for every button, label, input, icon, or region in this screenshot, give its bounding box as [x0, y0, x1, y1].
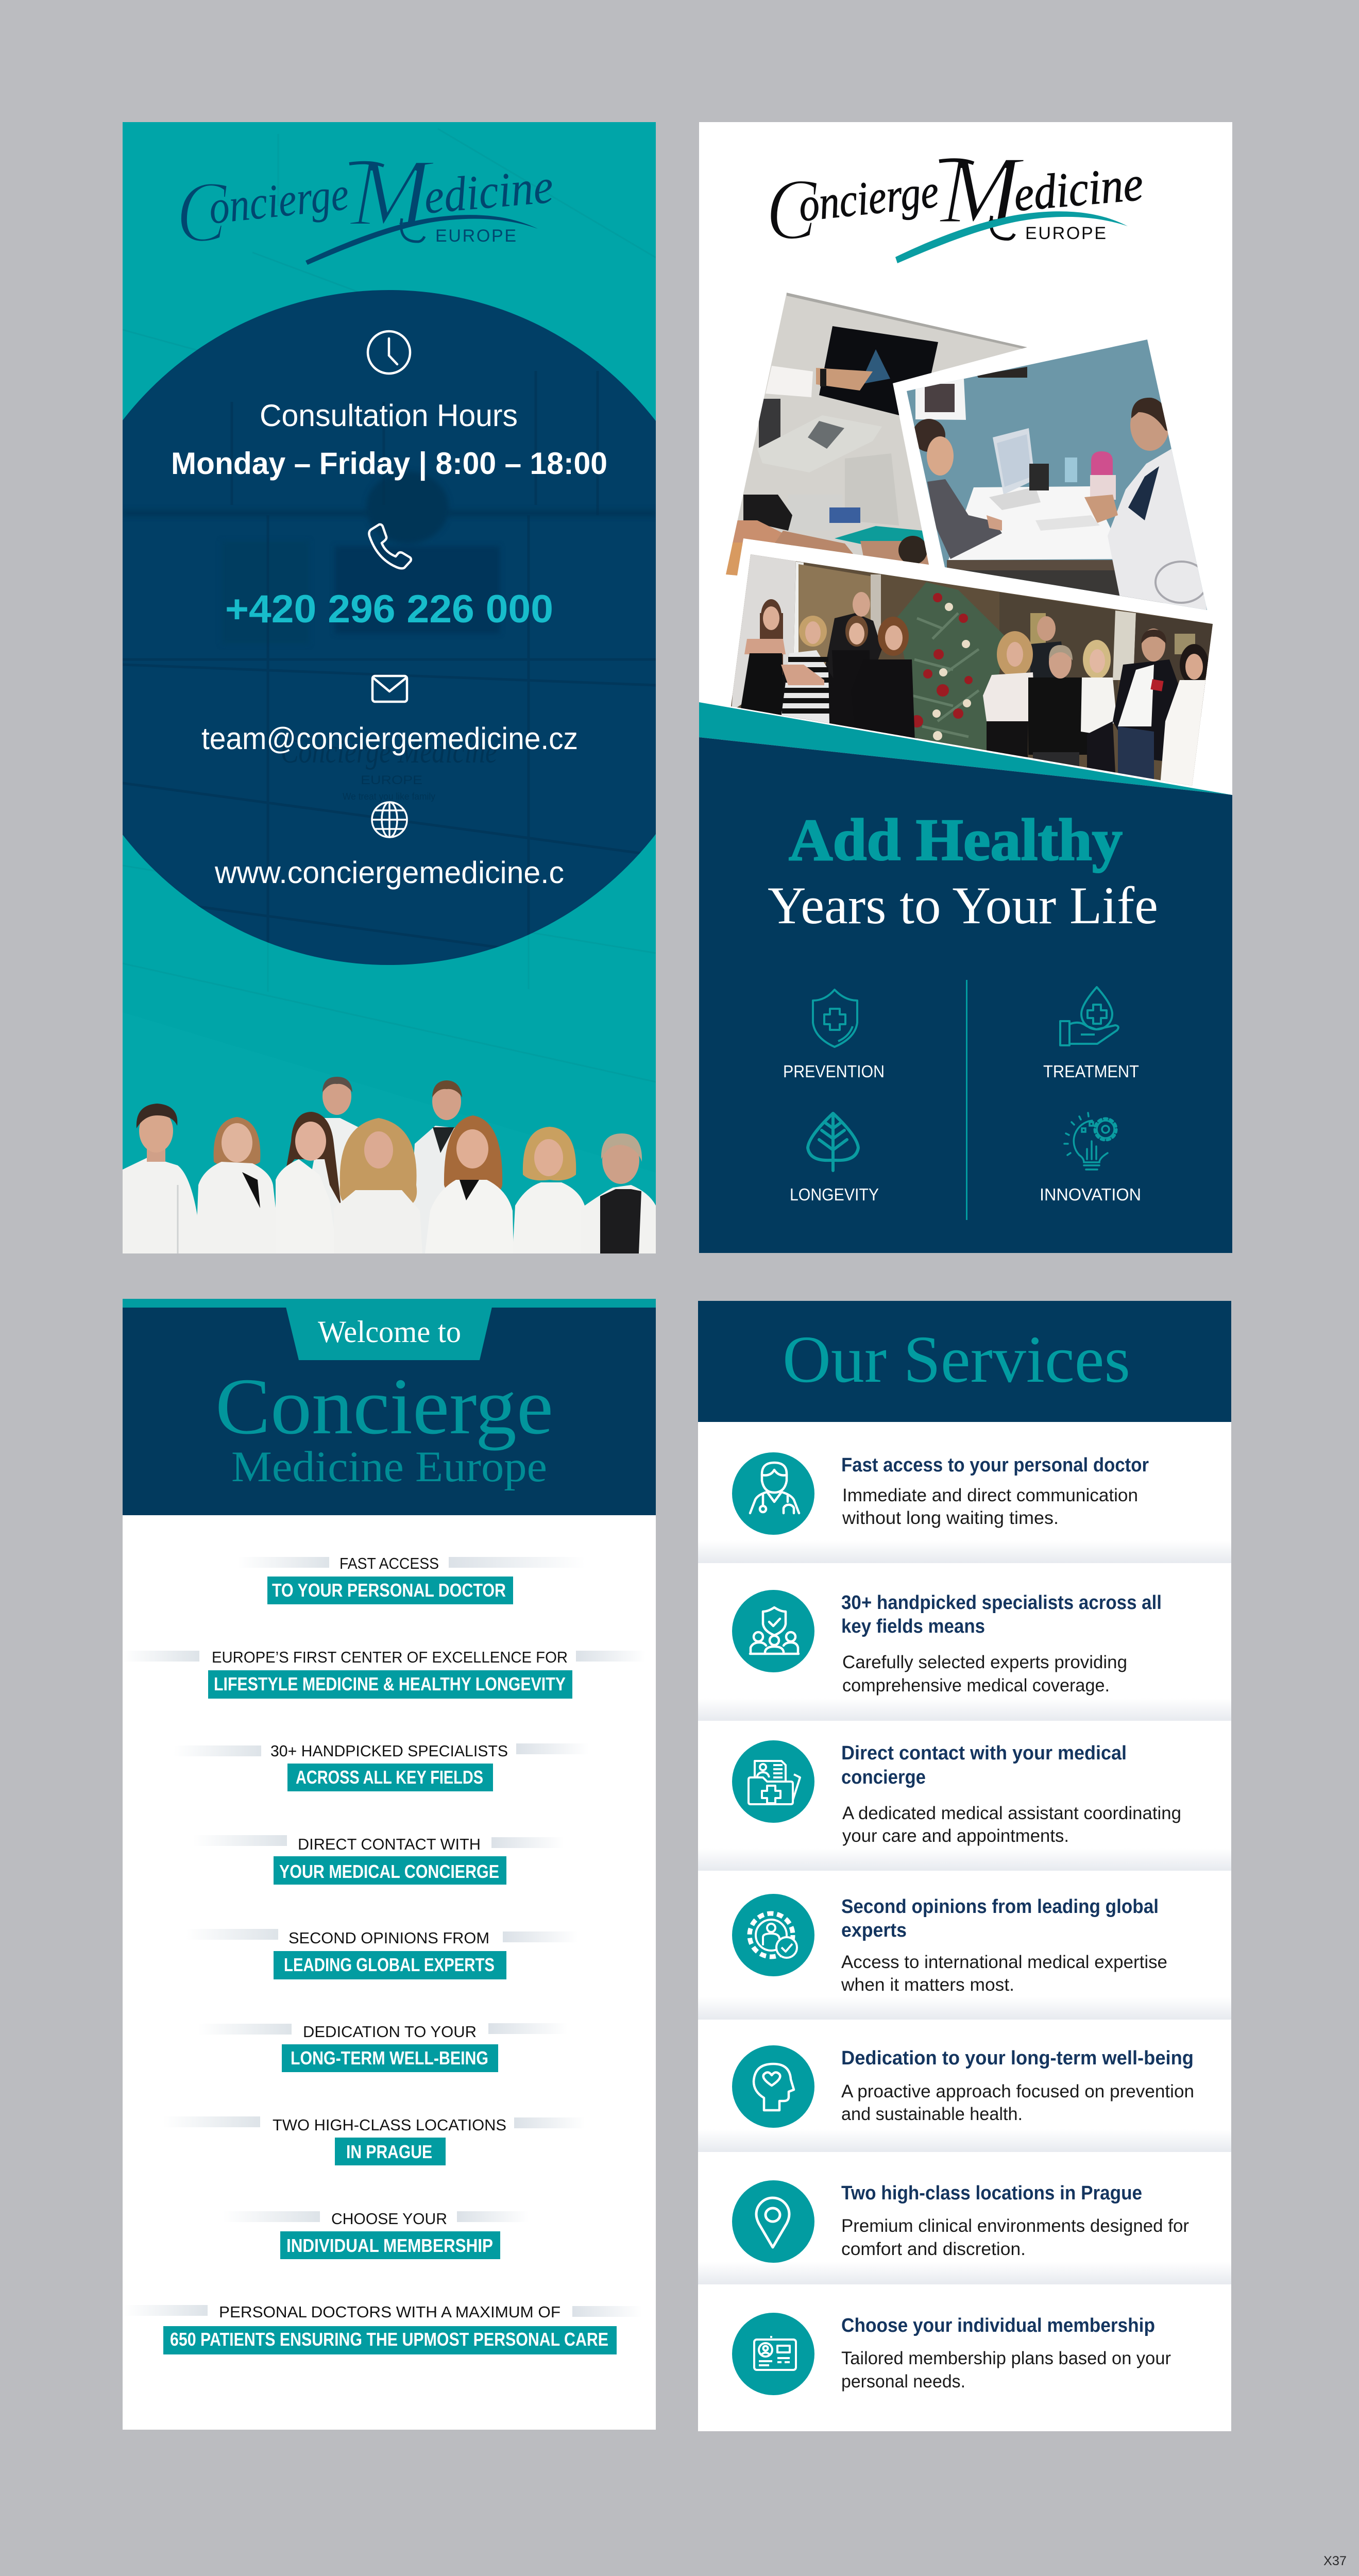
service title [841, 1896, 1159, 1941]
logo: black on white: edicine [1012, 156, 1145, 222]
list item: personal doctors: PERSONAL DOCTORS WITH A MAXIMUM OF [219, 2303, 560, 2321]
list item: personal doctors: 650 PATIENTS ENSURING THE UPMOST PERSONAL CARE [170, 2329, 608, 2350]
list item: direct contact: DIRECT CONTACT WITH [298, 1835, 481, 1853]
service description: and sustainable health. [841, 2104, 1023, 2124]
logo: navy on teal: oncierge [206, 167, 351, 234]
icon: medical folder [732, 1740, 814, 1823]
service description [842, 1485, 1138, 1528]
service title [841, 1592, 1162, 1637]
service title: Two high-class locations in Prague [841, 2182, 1142, 2204]
icon: membership card [732, 2313, 814, 2395]
service description: Premium clinical environments designed for [841, 2216, 1189, 2236]
headline: years to your life: Years to Your Life [768, 876, 1158, 935]
service description: comprehensive medical coverage. [842, 1675, 1110, 1696]
list item: second opinions [186, 1929, 578, 1979]
icon: shield and people [732, 1590, 814, 1672]
heading: our services: Our Services [783, 1323, 1130, 1397]
logo: black on white: C [766, 161, 817, 258]
service description: A proactive approach focused on prevention [841, 2081, 1194, 2102]
service description: Carefully selected experts providing [842, 1652, 1127, 1672]
panel: add healthy years [699, 122, 1232, 1253]
service description: your care and appointments. [842, 1826, 1069, 1846]
service description: without long waiting times. [842, 1508, 1059, 1528]
service description: personal needs. [841, 2371, 965, 2392]
service description: when it matters most. [841, 1975, 1014, 1995]
list item: specialists: 30+ HANDPICKED SPECIALISTS [270, 1742, 508, 1760]
list item: membership [223, 2210, 529, 2259]
website address: www.conciergemedicine.c [214, 855, 564, 890]
list item: center of excellence: EUROPE’S FIRST CENTER OF EXCELLENCE FOR [212, 1648, 568, 1666]
list item: second opinions: LEADING GLOBAL EXPERTS [284, 1954, 495, 1975]
photo: ultrasound examination [721, 289, 1030, 577]
consultation hours label: Consultation Hours [260, 398, 518, 433]
list item: membership: INDIVIDUAL MEMBERSHIP [286, 2235, 493, 2256]
icon: leaf [808, 1113, 858, 1171]
watermark logo on wall [282, 739, 497, 802]
panel: welcome list [123, 1299, 656, 2430]
service: long-term well-being [732, 2045, 1194, 2128]
headline: add healthy: Add Healthy [789, 807, 1123, 873]
logo: black on white: oncierge [796, 164, 941, 231]
icon: light bulb with gear [1064, 1113, 1116, 1170]
watermark logo on wall: EUROPE [361, 773, 422, 787]
service description [842, 1652, 1127, 1696]
service title [841, 1742, 1127, 1788]
service: fast access [732, 1452, 1149, 1535]
service title: Second opinions from leading global [841, 1896, 1159, 1918]
list item: fast access: FAST ACCESS [339, 1554, 439, 1572]
label: longevity: LONGEVITY [790, 1185, 879, 1204]
services header band [698, 1301, 1231, 1422]
label: prevention: PREVENTION [783, 1062, 885, 1081]
list item: dedication: DEDICATION TO YOUR [303, 2023, 477, 2041]
corner code label: X37 [1323, 2554, 1347, 2568]
service description [841, 2216, 1189, 2259]
icon: doctor [732, 1452, 814, 1535]
panel: contact banner [123, 122, 656, 1253]
service: membership [732, 2313, 1171, 2395]
logo: black on white [766, 137, 1145, 263]
service description: Access to international medical expertise [841, 1952, 1167, 1972]
service: locations [732, 2180, 1189, 2263]
icon: gear with person and check [732, 1894, 814, 1976]
service title: Direct contact with your medical [841, 1742, 1127, 1764]
service: second opinions [732, 1894, 1167, 1995]
service description [841, 1952, 1167, 1995]
list item: membership: CHOOSE YOUR [331, 2210, 447, 2228]
service: medical concierge [732, 1740, 1181, 1846]
list item: fast access [237, 1554, 585, 1604]
header band [123, 1299, 656, 1515]
list item: second opinions: SECOND OPINIONS FROM [288, 1929, 489, 1947]
heading: medicine europe: Medicine Europe [231, 1443, 547, 1491]
icon: hand holding drop [1060, 987, 1118, 1045]
icon: clock [368, 331, 410, 374]
list item: center of excellence: LIFESTYLE MEDICINE & HEALTHY LONGEVITY [214, 1673, 566, 1694]
service title: Fast access to your personal doctor [841, 1454, 1149, 1476]
label: innovation: INNOVATION [1040, 1185, 1141, 1204]
icon: shield with cross [813, 990, 857, 1047]
icon: map pin [732, 2180, 814, 2263]
logo: navy on teal: M [349, 140, 435, 246]
photo: team by christmas tree [726, 551, 1221, 793]
service title: Dedication to your long-term well-being [841, 2047, 1194, 2069]
consultation times: Monday – Friday | 8:00 – 18:00 [171, 446, 607, 481]
watermark logo on wall: Concierge Medicine [281, 733, 497, 770]
logo: navy on teal [176, 140, 555, 265]
list item: direct contact [193, 1835, 564, 1885]
service title: key fields means [841, 1616, 985, 1637]
list item: locations: TWO HIGH-CLASS LOCATIONS [273, 2116, 506, 2134]
icon: globe [372, 802, 407, 837]
list item: specialists: ACROSS ALL KEY FIELDS [296, 1767, 483, 1788]
service: specialists [732, 1590, 1162, 1696]
list item: dedication: LONG-TERM WELL-BEING [291, 2047, 488, 2069]
service description: Tailored membership plans based on your [841, 2348, 1171, 2368]
service title: 30+ handpicked specialists across all [841, 1592, 1162, 1614]
list item: fast access: TO YOUR PERSONAL DOCTOR [272, 1580, 506, 1601]
icon: envelope [372, 676, 407, 702]
photo: doctor consultation at desk [896, 335, 1216, 613]
list item: center of excellence [123, 1648, 645, 1699]
phone number: +420 296 226 000 [225, 587, 553, 631]
watermark logo on wall: We treat you like family [343, 791, 435, 802]
email address: team@conciergemedicine.cz [201, 721, 578, 756]
list item: locations [163, 2116, 585, 2165]
team photo: doctors in white coats [123, 1077, 656, 1253]
list item: locations: IN PRAGUE [346, 2141, 432, 2162]
service description: A dedicated medical assistant coordinating [842, 1803, 1181, 1823]
logo: navy on teal: edicine [422, 158, 555, 224]
list item: personal doctors [124, 2303, 642, 2354]
logo: black on white: EUROPE [1025, 224, 1106, 243]
list item: direct contact: YOUR MEDICAL CONCIERGE [279, 1861, 499, 1882]
heading: concierge: Concierge [215, 1362, 553, 1451]
service description: Immediate and direct communication [842, 1485, 1138, 1505]
dark circle with contact details [52, 290, 726, 979]
service description [841, 2348, 1171, 2392]
teal slanted ribbon [699, 702, 1232, 795]
panel: our services [698, 1301, 1231, 2431]
service title: experts [841, 1920, 907, 1941]
service title: concierge [841, 1767, 926, 1788]
navy panel [699, 737, 1232, 1253]
logo: navy on teal: C [176, 163, 227, 260]
service title: Choose your individual membership [841, 2315, 1155, 2336]
service description [841, 2081, 1194, 2124]
icon: head with heart [732, 2045, 814, 2128]
heading: welcome to: Welcome to [318, 1315, 461, 1349]
list item: dedication [198, 2023, 568, 2072]
service description: comfort and discretion. [841, 2239, 1026, 2259]
icon: phone [369, 524, 411, 568]
label: treatment: TREATMENT [1043, 1062, 1139, 1081]
list item: specialists [174, 1742, 589, 1791]
logo: navy on teal: EUROPE [435, 226, 516, 246]
service description [842, 1803, 1181, 1846]
logo: black on white: M [939, 137, 1025, 243]
